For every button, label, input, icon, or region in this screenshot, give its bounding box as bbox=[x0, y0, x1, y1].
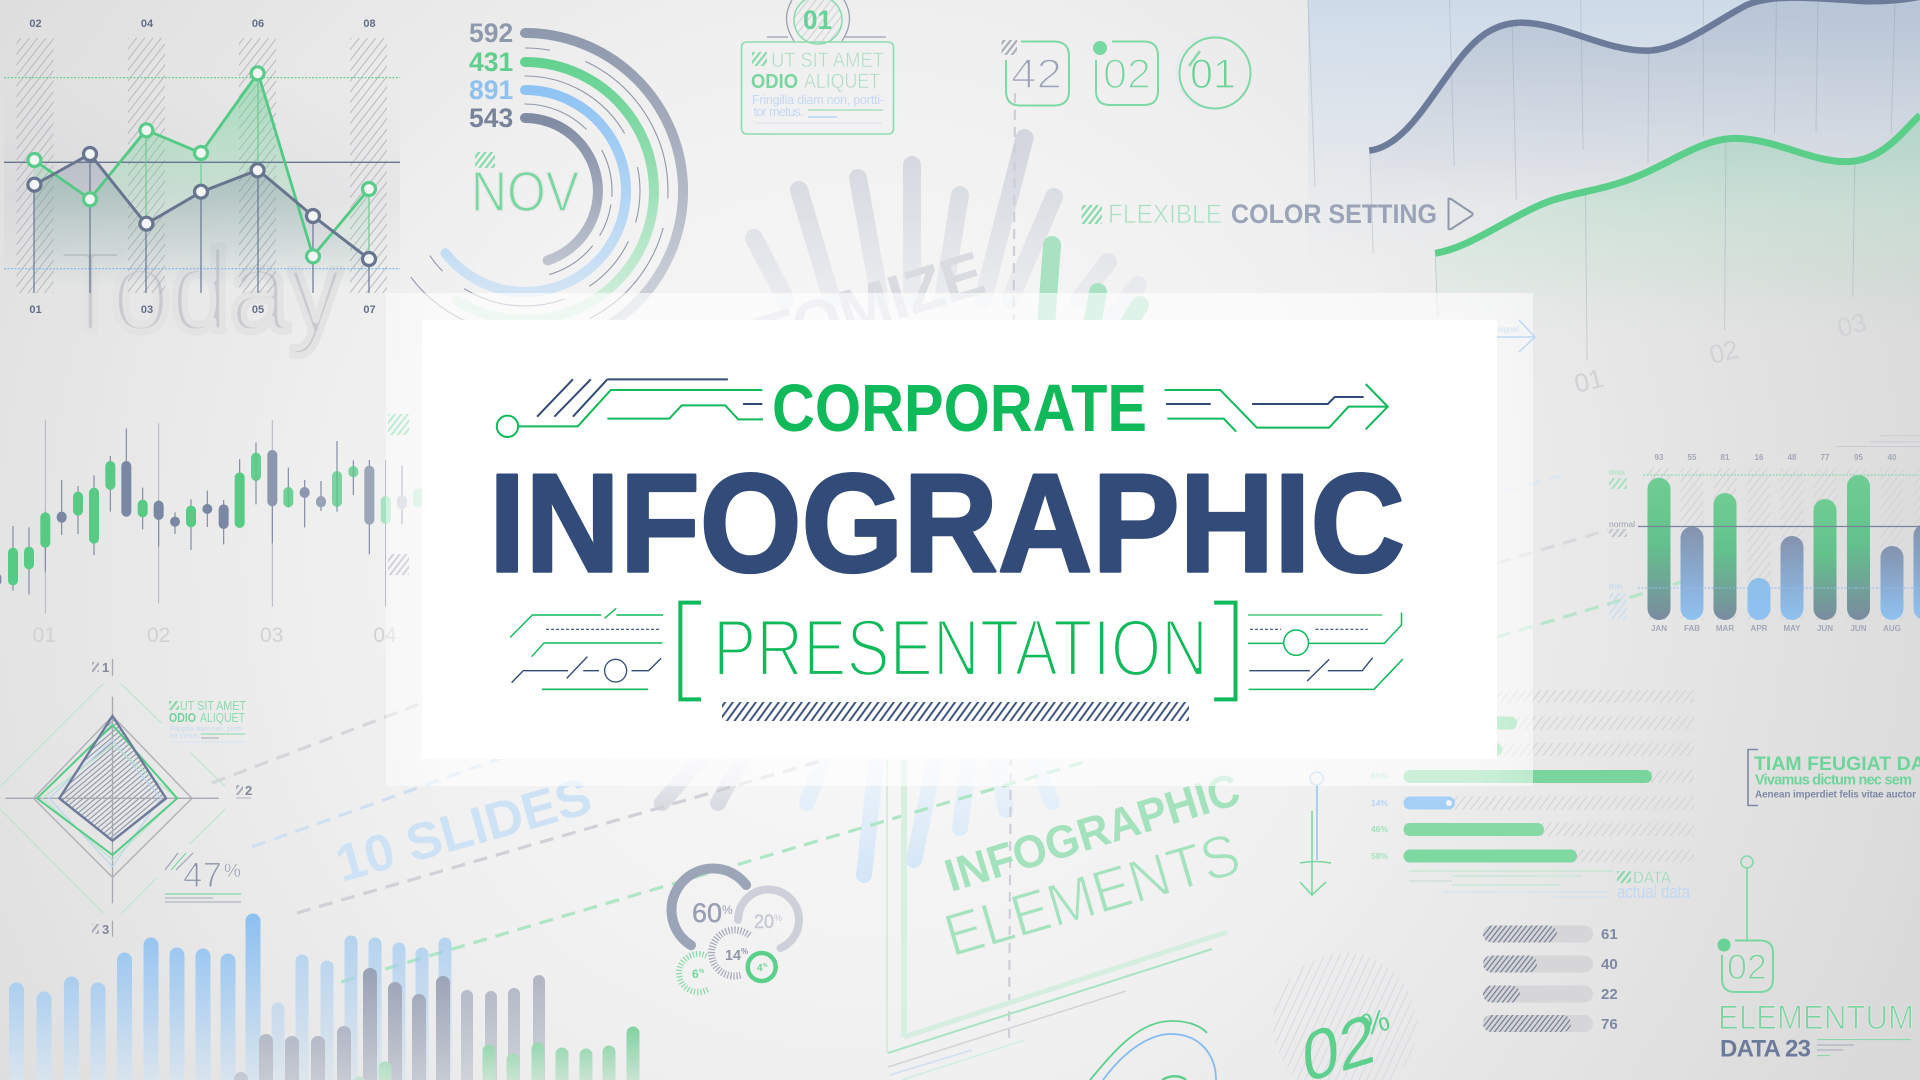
radar chart: ODIO bbox=[169, 710, 196, 725]
radial chart NOV: 431 bbox=[469, 47, 513, 77]
radar chart: 3 bbox=[102, 922, 109, 937]
line chart top left: 02 bbox=[29, 18, 42, 30]
percent badge 02: % bbox=[1358, 1002, 1393, 1043]
info block tiam feugiat: Vivamus dictum nec sem bbox=[1755, 772, 1912, 788]
line chart top left: 07 bbox=[363, 304, 376, 316]
horizontal bar chart: 58% bbox=[1371, 851, 1388, 861]
number badges 42 02 01 bbox=[1002, 35, 1250, 109]
gauges 60 20 14 6 4 percent: 4 bbox=[757, 963, 763, 974]
gauges 60 20 14 6 4 percent: 60 bbox=[692, 898, 722, 928]
radial chart NOV: NOV bbox=[471, 160, 579, 224]
hatched underline bbox=[722, 702, 1189, 721]
candlestick side hatches bbox=[388, 414, 409, 575]
horizontal bar chart: 46% bbox=[1371, 824, 1388, 834]
horizontal bar chart: 14% bbox=[1371, 798, 1388, 808]
progress pills: 40 bbox=[1601, 956, 1618, 973]
line chart top left: 01 bbox=[29, 304, 42, 316]
radar chart: UT SIT AMET bbox=[180, 698, 246, 713]
right column chart: FAB bbox=[1684, 624, 1700, 633]
info block tiam feugiat bbox=[1748, 750, 1920, 806]
gauges 60 20 14 6 4 percent: % bbox=[774, 913, 782, 923]
gauges 60 20 14 6 4 percent bbox=[656, 853, 799, 992]
right column chart: normal bbox=[1609, 519, 1635, 529]
line chart top left: 03 bbox=[141, 304, 153, 316]
candlestick chart bbox=[0, 420, 423, 647]
right column chart: 48 bbox=[1788, 453, 1797, 462]
line chart top left: 08 bbox=[363, 18, 376, 30]
element badge 02: 02 bbox=[1727, 948, 1767, 987]
title circuit bottom and brackets bbox=[510, 603, 1403, 699]
line chart top left bbox=[4, 18, 400, 356]
top right wave chart bbox=[1308, 0, 1920, 399]
infographic elements label: INFOGRAPHIC bbox=[939, 763, 1246, 902]
right column chart: AUG bbox=[1883, 624, 1901, 633]
title infographic: INFOGRAPHIC bbox=[489, 444, 1405, 601]
right column chart: max bbox=[1609, 467, 1626, 477]
infographic elements label: ELEMENTS bbox=[937, 820, 1247, 969]
right column chart: 77 bbox=[1821, 453, 1830, 462]
gauges 60 20 14 6 4 percent: % bbox=[699, 969, 705, 975]
right column chart: MAY bbox=[1783, 624, 1801, 633]
radar chart bbox=[0, 659, 252, 937]
number badges 42 02 01: 01 bbox=[1190, 50, 1236, 97]
number badges 42 02 01: 02 bbox=[1103, 50, 1151, 97]
radial chart NOV: 543 bbox=[469, 103, 513, 133]
bottom arcs bbox=[1090, 1021, 1216, 1080]
radial chart NOV: 891 bbox=[469, 75, 513, 105]
translucent veil panel bbox=[386, 293, 1533, 786]
candlestick chart: 01 bbox=[33, 624, 56, 647]
horizontal bar chart: 85% bbox=[1371, 771, 1388, 781]
callout card 01: Fringilla diam non, portti- bbox=[752, 93, 884, 107]
right column chart: 81 bbox=[1721, 453, 1730, 462]
candlestick chart: 02 bbox=[147, 624, 170, 647]
percent badge 02 bbox=[1273, 953, 1417, 1080]
progress pills: 22 bbox=[1601, 986, 1618, 1003]
diagonal dashed lines bbox=[212, 474, 1695, 982]
top right wave chart: 03 bbox=[1834, 307, 1870, 343]
bottom left bar chart bbox=[16, 921, 633, 1080]
right column chart: 16 bbox=[1755, 453, 1764, 462]
gauges 60 20 14 6 4 percent: 6 bbox=[692, 967, 699, 981]
radial chart NOV: 592 bbox=[469, 18, 513, 48]
flexible color setting label: COLOR SETTING bbox=[1231, 199, 1437, 229]
radar chart: 47 bbox=[183, 856, 222, 895]
gauges 60 20 14 6 4 percent: % bbox=[722, 903, 733, 917]
line chart top left: Today bbox=[58, 225, 342, 356]
right column chart: APR bbox=[1751, 624, 1768, 633]
radar chart: tor metus. bbox=[170, 733, 200, 740]
top right wave chart: 02 bbox=[1706, 334, 1742, 370]
callout card 01: ALIQUET bbox=[804, 70, 880, 93]
title presentation: PRESENTATION bbox=[713, 604, 1208, 694]
title circuit top bbox=[497, 379, 1388, 437]
top right wave chart: 01 bbox=[1571, 363, 1607, 399]
gauges 60 20 14 6 4 percent: 20 bbox=[754, 912, 774, 933]
horizontal bar chart bbox=[1371, 690, 1694, 902]
radial chart NOV bbox=[382, 18, 683, 348]
gauges 60 20 14 6 4 percent: 14 bbox=[725, 947, 742, 964]
right column chart: MAR bbox=[1716, 624, 1734, 633]
right column chart: JUN bbox=[1817, 624, 1833, 633]
horizontal bar chart: actual data bbox=[1617, 882, 1691, 902]
line chart top left: 04 bbox=[141, 18, 154, 30]
number badges 42 02 01: 42 bbox=[1011, 50, 1062, 97]
radar chart: Fringilla diam non, portti- bbox=[170, 726, 245, 733]
callout card 01: tor metus. bbox=[754, 105, 804, 119]
right column chart: 40 bbox=[1888, 453, 1897, 462]
candlestick chart: 03 bbox=[260, 624, 283, 647]
small faint arrow bbox=[1497, 320, 1535, 352]
title corporate: CORPORATE bbox=[772, 371, 1147, 446]
callout card 01 bbox=[742, 0, 894, 134]
right column chart: JUN bbox=[1850, 624, 1867, 633]
ten slides label: 10 SLIDES bbox=[330, 767, 598, 894]
info block tiam feugiat: Aenean imperdiet felis vitae auctor bbox=[1755, 790, 1916, 800]
element badge 02 bbox=[1718, 856, 1914, 1062]
candlestick chart: 04 bbox=[373, 624, 397, 647]
sunburst customize: CUSTOMIZE bbox=[624, 239, 992, 411]
line chart top left: 06 bbox=[252, 18, 264, 30]
radar chart: 2 bbox=[245, 783, 252, 798]
radar chart: % bbox=[224, 861, 241, 882]
progress pills bbox=[1483, 926, 1618, 1033]
gauges 60 20 14 6 4 percent: % bbox=[741, 947, 748, 956]
flexible color setting label: FLEXIBLE bbox=[1108, 199, 1222, 229]
right column chart: 95 bbox=[1854, 453, 1863, 462]
right column chart: JAN bbox=[1651, 624, 1667, 633]
sunburst customize bbox=[624, 93, 1140, 1038]
right column chart: 55 bbox=[1688, 453, 1697, 462]
perspective frame lines bbox=[887, 760, 1227, 1080]
callout card 01: UT SIT AMET bbox=[771, 49, 884, 72]
progress pills: 76 bbox=[1601, 1016, 1618, 1033]
arrow pin bbox=[1300, 772, 1331, 895]
small faint arrow: signal bbox=[1498, 325, 1519, 334]
right column chart: 93 bbox=[1655, 453, 1664, 462]
callout card 01: 01 bbox=[803, 5, 832, 35]
right column chart: min bbox=[1609, 581, 1623, 591]
callout card 01: ODIO bbox=[751, 71, 798, 93]
element badge 02: DATA 23 bbox=[1720, 1036, 1811, 1062]
white title panel bbox=[422, 320, 1497, 759]
radar chart: ALIQUET bbox=[200, 710, 245, 725]
line chart top left: 05 bbox=[252, 304, 264, 316]
right column chart bbox=[1609, 436, 1920, 633]
flexible color setting label bbox=[1082, 199, 1473, 229]
radar chart: 1 bbox=[102, 660, 109, 675]
gauges 60 20 14 6 4 percent: % bbox=[763, 963, 768, 969]
horizontal bar chart: DATA bbox=[1633, 868, 1672, 887]
progress pills: 61 bbox=[1601, 926, 1618, 943]
